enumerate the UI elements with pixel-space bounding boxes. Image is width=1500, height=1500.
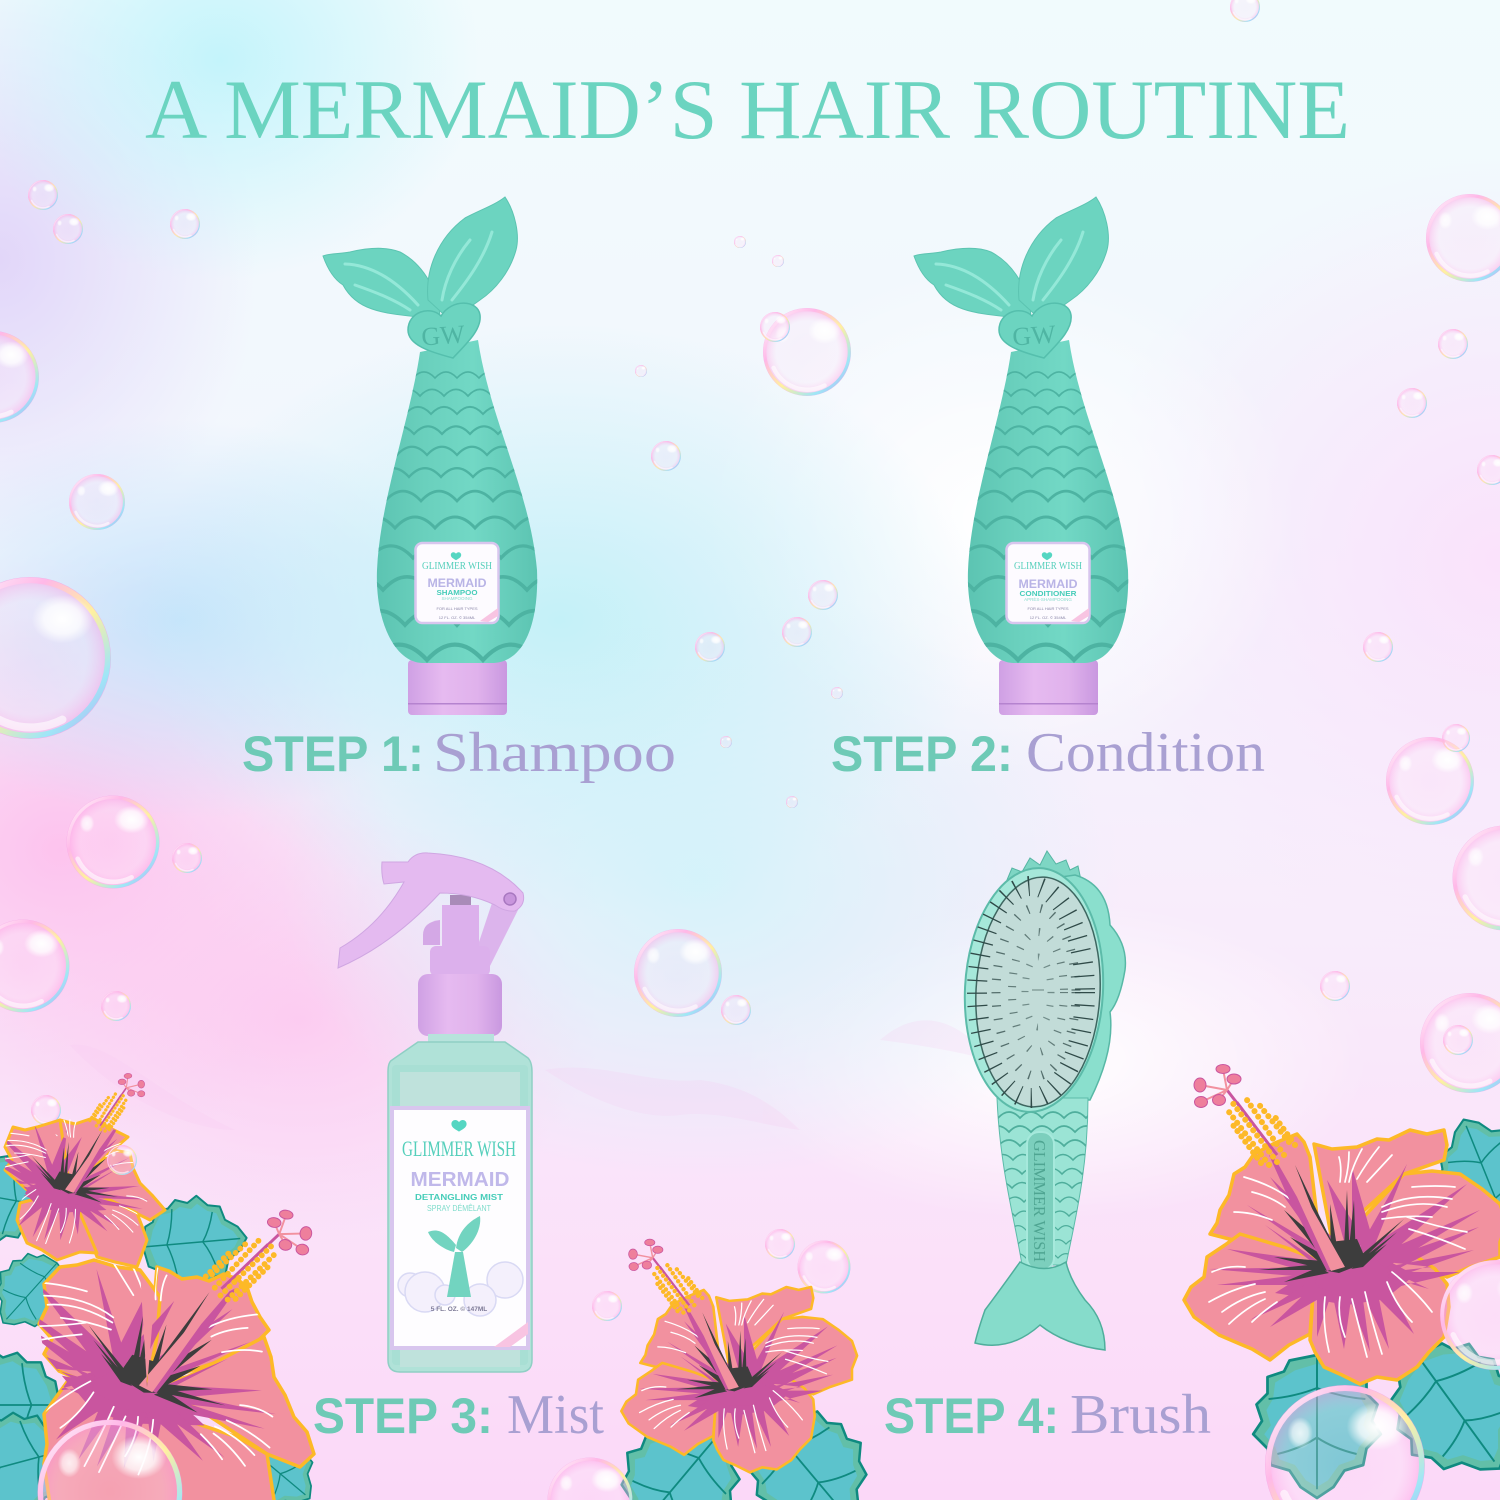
shampoo label — [416, 543, 498, 623]
step 3 caption: Mist — [507, 1384, 604, 1446]
mist label: 5 FL. OZ. © 147ML — [431, 1305, 487, 1313]
shampoo label: 12 FL. OZ. © 354ML — [439, 615, 476, 620]
bristles — [977, 886, 1085, 1098]
detangling brush — [964, 850, 1126, 1351]
shampoo label: FOR ALL HAIR TYPES — [436, 606, 478, 611]
step 4 caption — [884, 1384, 1211, 1446]
foreground bubbles — [37, 1145, 1500, 1500]
hibiscus: large left — [37, 1210, 316, 1500]
conditioner label: CONDITIONER — [1020, 591, 1076, 598]
mini mermaid tail — [428, 1216, 480, 1297]
bubbles: left side — [0, 180, 202, 1125]
step 3 caption — [313, 1384, 604, 1446]
shampoo label: GLIMMER WISH — [422, 560, 492, 572]
brush cushion — [970, 874, 1106, 1110]
step 1 caption: STEP 1: — [242, 726, 424, 782]
step 2 caption — [831, 722, 1265, 784]
mist label: GLIMMER WISH — [402, 1136, 516, 1161]
bubbles: right side — [1320, 194, 1500, 1093]
title: A MERMAID’S HAIR ROUTINE — [145, 63, 1350, 157]
label bubbles — [398, 1262, 523, 1316]
leaves behind flowers — [0, 1101, 1500, 1500]
shampoo label: MERMAID — [428, 578, 486, 590]
shampoo bottle — [249, 197, 707, 715]
conditioner label: APRÈS-SHAMPOOING — [1024, 596, 1072, 602]
conditioner label: FOR ALL HAIR TYPES — [1027, 606, 1069, 611]
brush head — [959, 865, 1109, 1115]
step 4 caption: Brush — [1070, 1384, 1211, 1446]
conditioner label: GLIMMER WISH — [1014, 560, 1082, 572]
step 1 caption: Shampoo — [433, 722, 676, 784]
step 1 caption — [242, 722, 676, 784]
conditioner label: 12 FL. OZ. © 354ML — [1030, 615, 1067, 620]
step 2 caption: Condition — [1026, 722, 1265, 784]
mist label: DETANGLING MIST — [415, 1192, 504, 1202]
step 4 caption: STEP 4: — [884, 1388, 1059, 1444]
bubbles: centre — [592, 0, 1260, 1321]
brush handle — [996, 1098, 1088, 1268]
hibiscus: small top-left — [0, 1073, 165, 1267]
mist spray bottle — [338, 853, 532, 1372]
brush back fins — [1040, 875, 1125, 1100]
shampoo label: SHAMPOOING — [441, 596, 473, 601]
glass bottle body — [388, 1034, 532, 1372]
pump collar — [418, 905, 502, 1036]
step 2 caption: STEP 2: — [831, 726, 1013, 782]
conditioner label — [1006, 543, 1090, 623]
shampoo label: SHAMPOO — [436, 588, 478, 597]
conditioner bottle — [840, 197, 1298, 715]
mist label: SPRAY DÉMÊLANT — [427, 1204, 491, 1213]
conditioner label: MERMAID — [1018, 579, 1078, 591]
brush handle: GLIMMER WISH — [1030, 1140, 1049, 1262]
hibiscus: large right — [1184, 1064, 1500, 1384]
spray trigger — [338, 853, 524, 970]
mist label: MERMAID — [410, 1169, 510, 1191]
hibiscus: centre — [621, 1239, 857, 1472]
mist label — [392, 1108, 528, 1348]
step 3 caption: STEP 3: — [313, 1388, 493, 1444]
brush tail fin — [975, 1262, 1105, 1350]
faint mermaid silhouettes — [70, 1020, 990, 1130]
brush crown — [1007, 851, 1082, 885]
